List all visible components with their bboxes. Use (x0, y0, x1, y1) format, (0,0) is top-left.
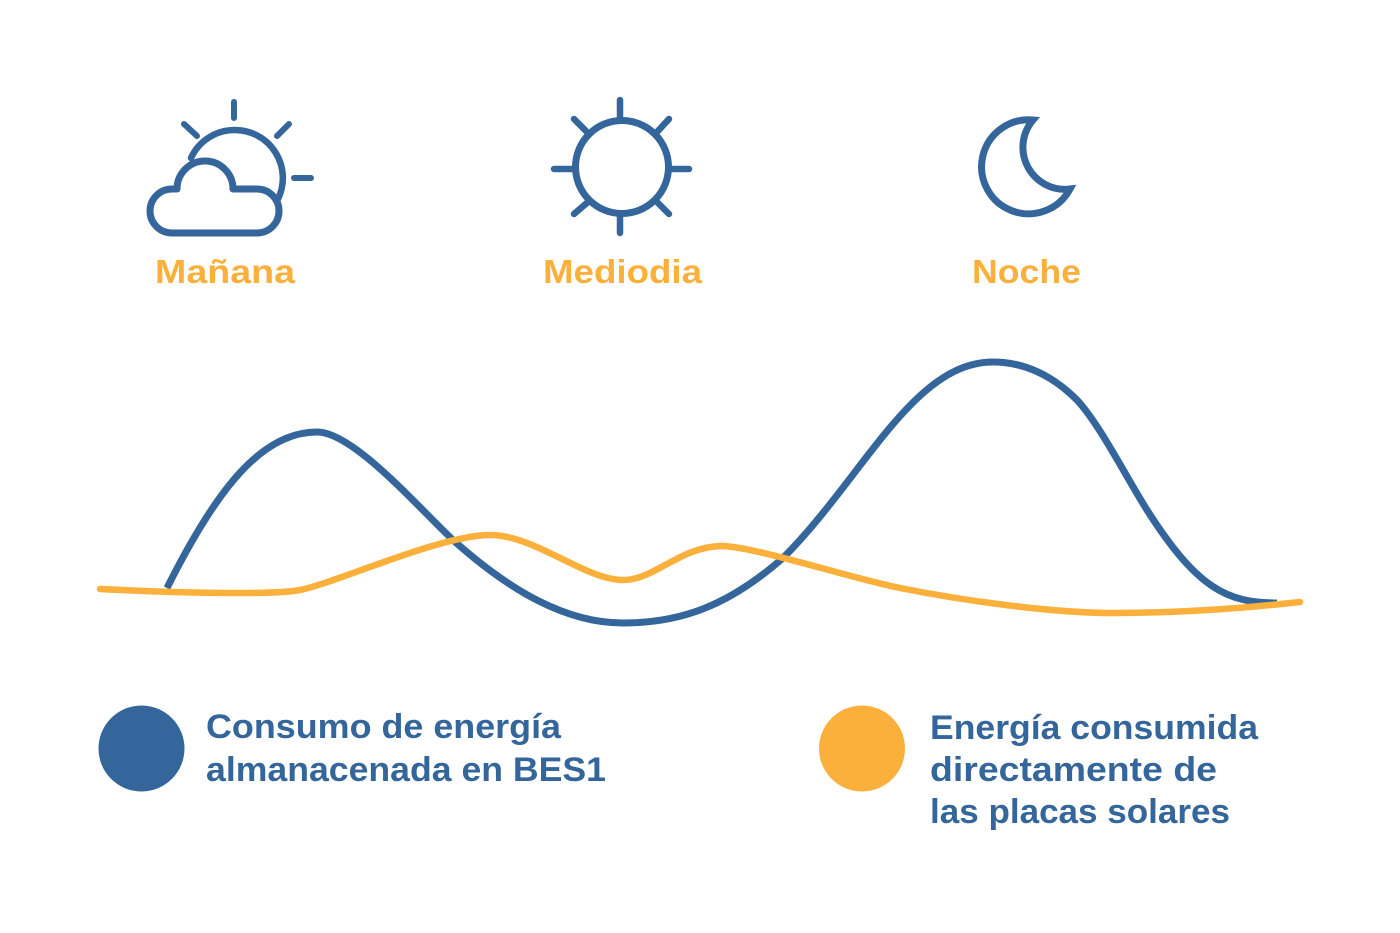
heading: Mañana: Mañana (155, 253, 296, 290)
legend text: solar panels: Energía consumida (930, 709, 1259, 747)
legend: BES1 storage (98, 706, 606, 792)
icon: sun behind cloud (morning) (150, 102, 311, 233)
legend text: BES1 storage: Consumo de energía (206, 708, 562, 746)
legend swatch: blue (98, 706, 184, 792)
chart line: energy consumed directly from solar panels (100, 535, 1300, 613)
icon: sun (midday) (554, 100, 689, 233)
legend: solar panels (819, 706, 1259, 831)
legend text: solar panels: directamente de (930, 751, 1217, 789)
legend text: BES1 storage: almanacenada en BES1 (206, 751, 606, 789)
legend swatch: orange (819, 706, 905, 792)
chart line: energy consumed from BES1 storage (167, 362, 1277, 623)
icon: moon (night) (982, 120, 1070, 214)
heading: Mediodia: Mediodia (543, 253, 703, 290)
heading: Noche: Noche (972, 253, 1081, 290)
legend text: solar panels: las placas solares (930, 793, 1230, 831)
